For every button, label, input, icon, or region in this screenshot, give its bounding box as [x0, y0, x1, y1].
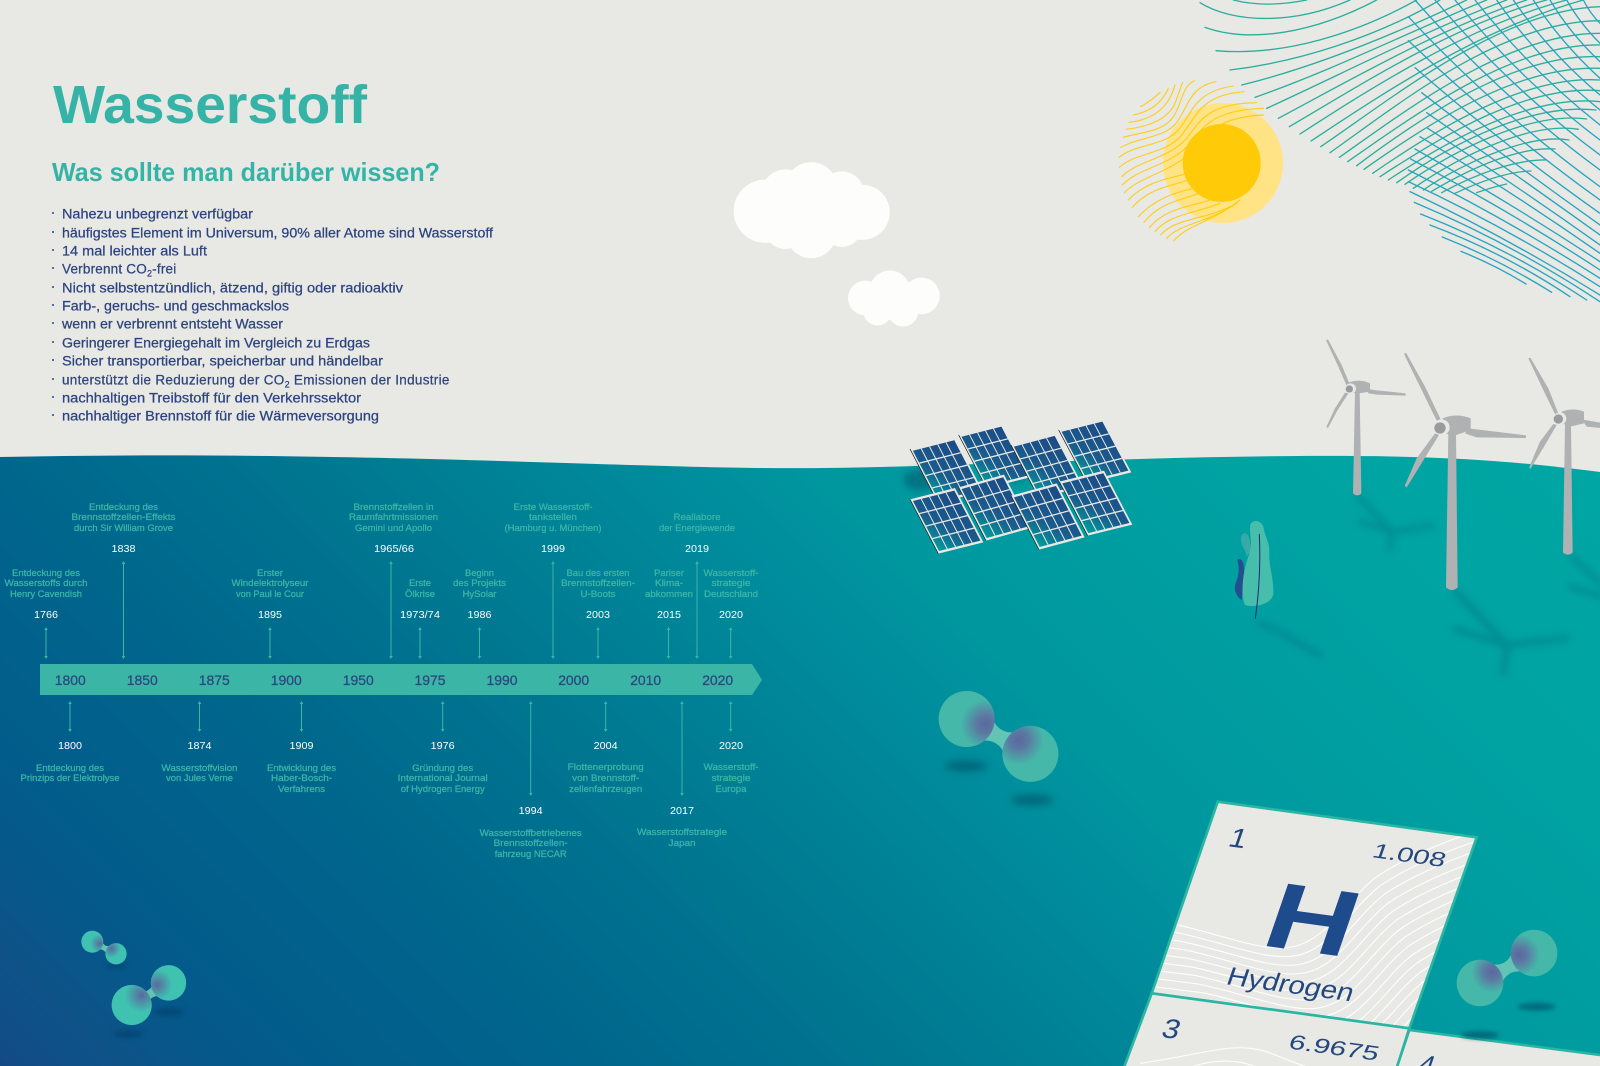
blue mesh lines	[1408, 0, 1600, 302]
timeline decade labels: 1800	[55, 672, 86, 688]
timeline decade labels: 1975	[414, 672, 446, 688]
timeline decade labels: 1900	[271, 672, 302, 688]
fact list: Geringerer Energiegehalt im Vergleich zu Erdgas	[62, 335, 370, 350]
timeline	[4, 502, 762, 860]
icon: wind turbines	[1326, 340, 1600, 590]
event: 1766: Wasserstoffs durch	[4, 578, 88, 589]
background: sea gradient landscape	[0, 455, 1600, 1066]
event: 1994	[480, 702, 582, 860]
event: 1909: Verfahrens	[278, 784, 325, 795]
fact list: -frei	[152, 261, 176, 276]
timeline decade labels	[55, 672, 733, 688]
timeline decade labels: 1850	[127, 672, 158, 688]
fact list: Nicht selbstentzündlich, ätzend, giftig oder radioaktiv	[62, 280, 403, 295]
cell: hydrogen: 1	[1225, 822, 1252, 854]
timeline decade labels: 2020	[702, 672, 733, 688]
event: 1895: 1895	[258, 609, 282, 621]
event: 2020 Deutschland: Deutschland	[704, 589, 758, 600]
event: 1874: von Jules Verne	[166, 773, 233, 784]
event: 2015: abkommen	[645, 589, 693, 600]
timeline decade labels: 2010	[630, 672, 661, 688]
timeline decade labels: 1950	[343, 672, 374, 688]
timeline decade labels: 1875	[199, 672, 230, 688]
timeline bar	[40, 664, 762, 695]
event: 2020 Europa: Wasserstoff-	[704, 762, 758, 773]
molecule shadows	[945, 761, 1053, 805]
event: 1909: Haber-Bosch-	[271, 773, 332, 784]
event: 1986: 1986	[468, 609, 492, 621]
event: 1909: 1909	[290, 740, 314, 752]
cell: hydrogen: 1.008	[1369, 840, 1449, 872]
event: 2017: Wasserstoffstrategie	[637, 827, 727, 838]
back row panels	[910, 419, 1131, 503]
event: 2004	[568, 702, 644, 795]
turbine ground shadows	[1260, 496, 1600, 673]
event: 1874: 1874	[188, 740, 212, 752]
molecule: small bottom left	[77, 927, 131, 969]
timeline decade labels: 1990	[486, 672, 518, 688]
front row panels	[910, 471, 1132, 554]
event: 1999	[504, 502, 602, 658]
event: 1976: International Journal	[398, 773, 488, 784]
event: 1994: 1994	[519, 805, 543, 817]
event: 1766: 1766	[34, 609, 58, 621]
turbine 1	[1326, 340, 1406, 495]
event: 2019: Reallabore	[674, 512, 720, 523]
icon: tree	[1235, 521, 1273, 619]
icon: sun	[1119, 81, 1283, 241]
event: 1999: 1999	[541, 543, 565, 555]
fact list: Nahezu unbegrenzt verfügbar	[62, 206, 254, 221]
event: 1986: Beginn	[465, 568, 494, 579]
bullet markers	[52, 212, 54, 416]
event: 1965/66: Gemini und Apollo	[355, 523, 432, 534]
event: 2015: 2015	[657, 609, 681, 621]
cell: hydrogen: Hydrogen	[1223, 961, 1359, 1007]
molecule shadows	[113, 1008, 184, 1038]
event: 2017: 2017	[670, 805, 694, 817]
event: 1766	[4, 568, 88, 658]
molecule shadows	[1461, 1003, 1556, 1039]
sun halo	[1163, 103, 1283, 223]
event: 2003	[561, 568, 635, 658]
event: 2015	[645, 568, 693, 658]
event: 1994: fahrzeug NECAR	[495, 849, 567, 860]
decorative line mesh: wind field	[1200, 0, 1600, 302]
event: 1986: HySolar	[462, 589, 496, 600]
event: 1838: 1838	[112, 543, 136, 555]
event: 2004: zellenfahrzeugen	[569, 784, 642, 795]
cell: lithium partial: 6.9675	[1286, 1031, 1382, 1065]
event: 2020 Europa: Europa	[716, 784, 747, 795]
cell: hydrogen: H	[1252, 864, 1373, 977]
event: 1895: von Paul le Cour	[236, 589, 304, 600]
event: 2020 Deutschland: strategie	[712, 578, 750, 589]
fact list: 2	[285, 379, 290, 389]
event: 1909: Entwicklung des	[267, 763, 336, 774]
event: 1766: Entdeckung des	[12, 568, 80, 579]
event: 2019: 2019	[685, 543, 709, 555]
event: 1973/74: Erste	[409, 578, 431, 589]
event: 1994: Wasserstoffbetriebenes	[480, 828, 582, 839]
periodic table card	[1103, 802, 1600, 1066]
fact list: Verbrennt CO	[62, 261, 147, 276]
event: 1909	[267, 702, 336, 795]
cell: hydrogen	[1150, 800, 1478, 1028]
event: 2004: Flottenerprobung	[568, 762, 644, 773]
event: 2020 Europa: strategie	[712, 773, 750, 784]
fact list: unterstützt die Reduzierung der CO	[62, 372, 285, 387]
molecule: centre	[929, 681, 1068, 805]
event: 1838: Entdeckung des	[89, 502, 158, 513]
cell: lithium partial: 3	[1158, 1013, 1185, 1045]
turbine 3	[1528, 358, 1600, 555]
turbine 2	[1404, 353, 1526, 590]
cell: beryllium partial	[1396, 1030, 1600, 1066]
event: 2003: U-Boots	[580, 589, 616, 600]
event: 2020 Europa	[704, 702, 758, 795]
fact list: Emissionen der Industrie	[290, 372, 450, 387]
event: 1874	[162, 702, 238, 784]
title: Wasserstoff	[53, 75, 368, 135]
event: 2003: Brennstoffzellen-	[561, 578, 635, 589]
event: 2017: Japan	[668, 838, 696, 849]
event: 1986: des Projekts	[453, 578, 506, 589]
event: 2004: von Brennstoff-	[572, 773, 639, 784]
event: 1976: 1976	[431, 740, 455, 752]
event: 2020 Europa: 2020	[719, 740, 743, 752]
event: 1976: of Hydrogen Energy	[401, 784, 485, 795]
fact list	[52, 206, 493, 423]
event: 2019: der Energiewende	[659, 523, 735, 534]
sun wave lines	[1119, 81, 1263, 241]
fact list: nachhaltiger Brennstoff für die Wärmeversorgung	[62, 408, 379, 423]
event: 1895: Windelektrolyseur	[232, 578, 308, 589]
event: 2020 Deutschland: 2020	[719, 609, 743, 621]
molecule: right	[1448, 921, 1566, 1039]
event: 1800: 1800	[58, 740, 82, 752]
event: 1973/74: Ölkrise	[405, 589, 435, 600]
icon: solar panel array	[903, 419, 1132, 554]
event: 1994: Brennstoffzellen-	[494, 838, 568, 849]
event: 2015: Klima-	[655, 578, 683, 589]
panel shadows	[903, 468, 1027, 520]
event: 1800: Prinzips der Elektrolyse	[20, 773, 120, 784]
event: 1973/74: 1973/74	[400, 609, 440, 621]
sun core	[1183, 124, 1261, 202]
event: 2020 Deutschland	[704, 568, 758, 658]
event: 1976: Gründung des	[412, 763, 473, 774]
event: 2003: 2003	[586, 609, 610, 621]
card wave lines	[1155, 836, 1474, 1026]
teal mesh lines	[1200, 0, 1600, 193]
event: 1838	[72, 502, 176, 658]
event: 1895: Erster	[257, 568, 283, 579]
event: 1999: Erste Wasserstoff-	[514, 502, 592, 513]
event: 1800: Entdeckung des	[36, 763, 104, 774]
fact list: Farb-, geruchs- und geschmackslos	[62, 298, 289, 313]
event: 1999: tankstellen	[529, 512, 577, 523]
subtitle: Was sollte man darüber wissen?	[52, 157, 440, 187]
event: 1766: Henry Cavendish	[10, 589, 82, 600]
event: 1999: (Hamburg u. München)	[504, 523, 602, 534]
event: 2004: 2004	[594, 740, 618, 752]
fact list: Sicher transportierbar, speicherbar und händelbar	[62, 353, 384, 368]
event: 1838: Brennstoffzellen-Effekts	[72, 512, 176, 523]
event: 1965/66: Brennstoffzellen in	[354, 502, 434, 513]
event: 1965/66: 1965/66	[374, 543, 414, 555]
molecule: large bottom left	[104, 957, 194, 1038]
event: 1800	[20, 702, 120, 784]
event: 1895	[232, 568, 308, 658]
event: 1965/66	[349, 502, 438, 658]
timeline decade labels: 2000	[558, 672, 589, 688]
event: 2017	[637, 702, 727, 849]
event: 1976	[398, 702, 488, 795]
event: 2003: Bau des ersten	[566, 568, 630, 579]
event: 1986	[453, 568, 506, 658]
event: 1973/74	[400, 578, 440, 658]
event: 1965/66: Raumfahrtmissionen	[349, 512, 438, 523]
fact list: 14 mal leichter als Luft	[62, 243, 207, 258]
event: 2015: Pariser	[654, 568, 684, 579]
cell: lithium partial	[1123, 993, 1409, 1066]
event: 1838: durch Sir William Grove	[74, 523, 173, 534]
icon: large cloud	[734, 162, 890, 258]
icon: small cloud	[848, 270, 940, 327]
fact list: wenn er verbrennt entsteht Wasser	[61, 316, 284, 331]
fact list: häufigstes Element im Universum, 90% aller Atome sind Wasserstoff	[62, 225, 493, 240]
event: 1874: Wasserstoffvision	[162, 763, 238, 774]
event: 2019	[659, 512, 735, 658]
event: 2020 Deutschland: Wasserstoff-	[704, 568, 758, 579]
fact list: 2	[147, 268, 152, 278]
fact list: nachhaltigen Treibstoff für den Verkehrssektor	[62, 390, 362, 405]
